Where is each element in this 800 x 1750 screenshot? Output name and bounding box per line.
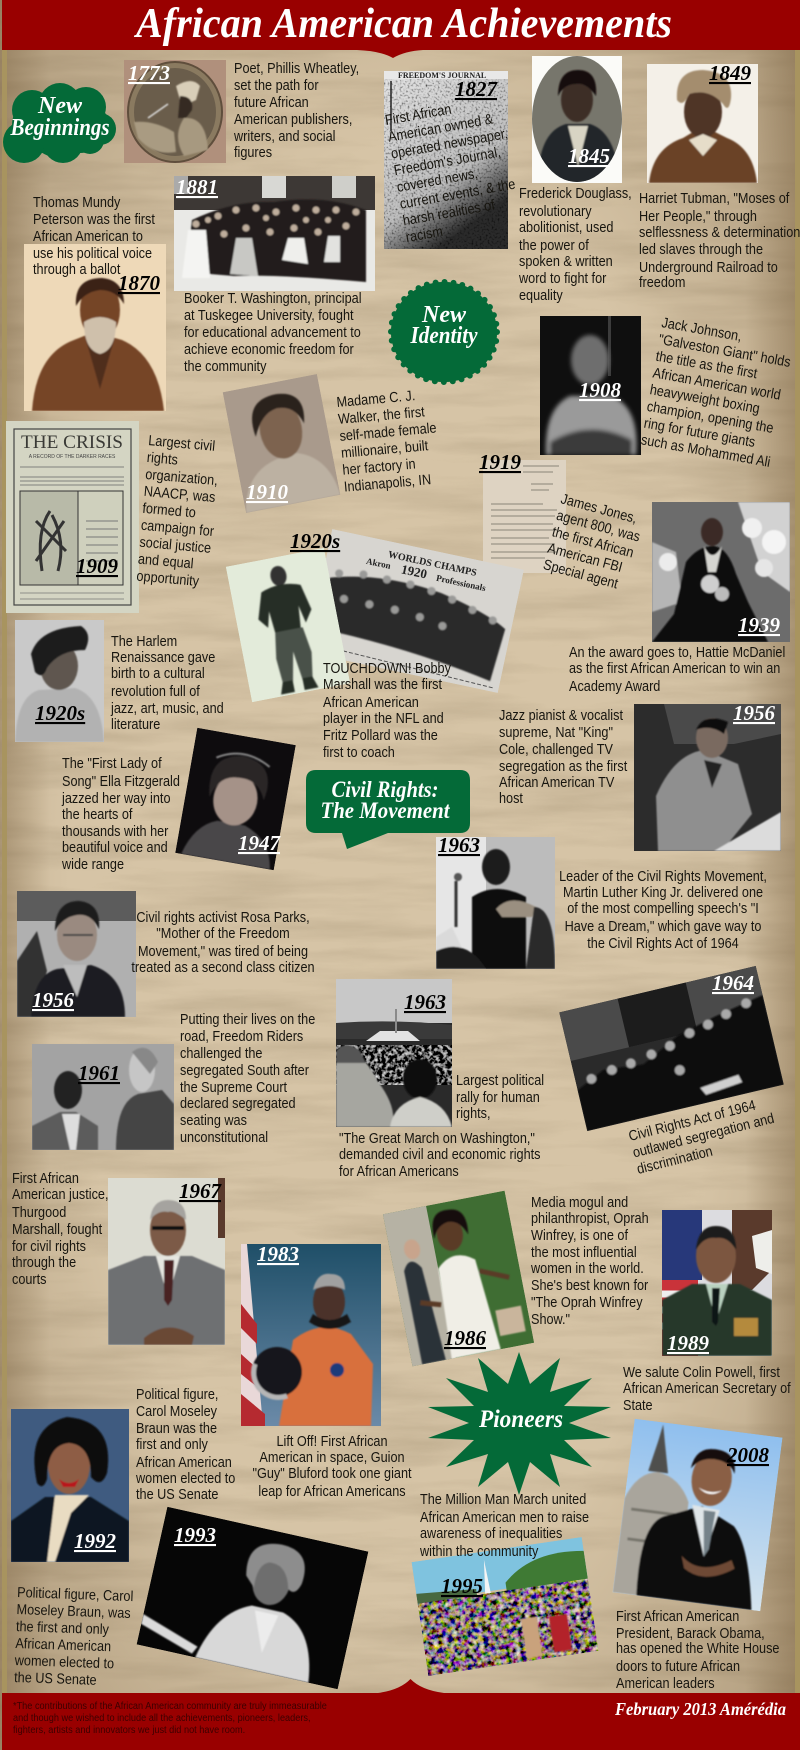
footer note: and though we wished to include all the achievements, pioneers, leaders, bbox=[13, 1712, 311, 1724]
text: Jack Johnson: Jack Johnson, bbox=[660, 314, 743, 344]
text: Ella Fitzgerald: the hearts of bbox=[62, 806, 133, 822]
text: Freedom's Journal: American owned & bbox=[387, 111, 494, 145]
text: Nat King Cole: segregation as the first bbox=[499, 758, 627, 774]
text: NAACP: rights bbox=[146, 449, 179, 468]
text: Jack Johnson: the title as the first bbox=[655, 348, 759, 382]
text: Frederick Douglass: abolitionist, used bbox=[519, 219, 613, 235]
text: Guion Bluford: "Guy" Bluford took one giant bbox=[252, 1465, 412, 1481]
text: Guion Bluford: leap for African Americans bbox=[258, 1483, 406, 1499]
text: Moseley Braun right: African American bbox=[136, 1454, 232, 1470]
year 1849: 1849 bbox=[709, 61, 752, 85]
year 1986: 1986 bbox=[444, 1326, 486, 1350]
text: Great March on Washington: "The Great March on Washington," bbox=[339, 1130, 535, 1146]
text: Harlem Renaissance: literature bbox=[111, 716, 160, 732]
text: Thurgood Marshall: through the bbox=[12, 1254, 76, 1270]
text: Rosa Parks: treated as a second class citizen bbox=[131, 959, 315, 975]
text: Bobby Marshall: first to coach bbox=[323, 744, 395, 760]
photo: Akron team 1920: Akron bbox=[365, 556, 392, 571]
text: Nat King Cole: African American TV bbox=[499, 774, 615, 790]
text: Jack Johnson: ring for future giants bbox=[643, 415, 757, 450]
photo: Bobby Marshall football player bbox=[226, 548, 350, 702]
text: Phillis Wheatley: set the path for bbox=[234, 77, 319, 93]
footer note: *The contributions of the African American community are truly immeasurable bbox=[13, 1700, 327, 1712]
text: Jack Johnson: heavyweight boxing bbox=[649, 381, 761, 416]
text: largest rally: Largest political bbox=[456, 1072, 544, 1088]
text: NAACP: social justice bbox=[139, 534, 212, 556]
text: Freedom Riders: declared segregated bbox=[180, 1095, 296, 1111]
year 1908: 1908 bbox=[579, 378, 622, 402]
photo: Akron team 1920 bbox=[306, 529, 524, 693]
text: Freedom's Journal: operated newspaper, bbox=[390, 125, 509, 162]
callout: Civil Rights The Movement: Civil Rights: bbox=[332, 777, 438, 802]
footer banner bbox=[2, 1679, 800, 1750]
text: Thurgood Marshall: American justice, bbox=[12, 1186, 109, 1202]
text: Thurgood Marshall: Marshall, fought bbox=[12, 1221, 102, 1237]
year 1845: 1845 bbox=[568, 144, 610, 168]
text: Ella Fitzgerald: jazzed her way into bbox=[61, 790, 170, 806]
year 1947: 1947 bbox=[238, 831, 282, 855]
callout: New Identity bbox=[391, 282, 497, 382]
text: Booker T. Washington: Booker T. Washington, principal bbox=[184, 290, 362, 306]
text: Thurgood Marshall: Thurgood bbox=[12, 1204, 66, 1220]
year 1964: 1964 bbox=[712, 971, 754, 995]
text: Moseley Braun right: Braun was the bbox=[136, 1420, 217, 1436]
text: Thomas Mundy Peterson: Peterson was the first bbox=[33, 211, 155, 227]
text: Thurgood Marshall: First African bbox=[12, 1170, 79, 1186]
photo: Freedom's Journal 1827 bbox=[384, 71, 508, 249]
text: Freedom's Journal: racism bbox=[404, 223, 444, 245]
photo: Tuskegee group 1881 bbox=[174, 176, 375, 291]
text: Freedom Riders: the Supreme Court bbox=[180, 1079, 287, 1095]
callout: New Identity: New bbox=[421, 302, 467, 328]
text: James Jones: agent 800, was bbox=[555, 507, 642, 545]
year 1939: 1939 bbox=[738, 613, 780, 637]
text: largest rally: rights, bbox=[456, 1105, 491, 1121]
text: Booker T. Washington: achieve economic freedom for bbox=[184, 341, 354, 357]
text: Thomas Mundy Peterson: African American to bbox=[33, 228, 143, 244]
callout: Pioneers star: Pioneers bbox=[478, 1406, 563, 1433]
text: Moseley Braun right: the US Senate bbox=[136, 1486, 218, 1502]
text: Freedom Riders: segregated South after bbox=[180, 1062, 309, 1078]
text: Colin Powell: We salute Colin Powell, first bbox=[623, 1364, 780, 1380]
text: Frederick Douglass: revolutionary bbox=[519, 203, 592, 219]
text: Harriet Tubman: led slaves through the bbox=[639, 241, 763, 257]
text: Harriet Tubman: Her People," through bbox=[639, 208, 757, 224]
year 2008: 2008 bbox=[726, 1443, 770, 1467]
text: Thurgood Marshall: for civil rights bbox=[12, 1238, 86, 1254]
text: Booker T. Washington: the community bbox=[184, 358, 267, 374]
text: Civil Rights Act: outlawed segregation and bbox=[631, 1110, 776, 1161]
year 1967: 1967 bbox=[179, 1179, 222, 1203]
text: Moseley Braun left: African American bbox=[15, 1635, 111, 1655]
text: Thomas Mundy Peterson: Thomas Mundy bbox=[33, 194, 121, 210]
text: Booker T. Washington: for educational advancement to bbox=[184, 324, 361, 340]
text: Oprah Winfrey: "The Oprah Winfrey bbox=[531, 1294, 643, 1310]
text: Bobby Marshall: Fritz Pollard was the bbox=[323, 727, 438, 743]
year 1910: 1910 bbox=[246, 480, 288, 504]
text: Thomas Mundy Peterson: use his political voice bbox=[33, 245, 152, 261]
text: Freedom Riders: seating was bbox=[180, 1112, 247, 1128]
text: Moseley Braun left: the first and only bbox=[16, 1618, 109, 1637]
year 1961: 1961 bbox=[78, 1061, 120, 1085]
text: Moseley Braun right: first and only bbox=[136, 1436, 208, 1452]
text: Oprah Winfrey: Show." bbox=[531, 1311, 570, 1327]
text: Moseley Braun left: Political figure, Carol bbox=[17, 1584, 134, 1604]
photo: Akron team 1920: WORLDS CHAMPS bbox=[387, 549, 478, 579]
year 1920s harlem: 1920s bbox=[35, 701, 85, 725]
text: Ella Fitzgerald: beautiful voice and bbox=[62, 839, 168, 855]
text: Thurgood Marshall: courts bbox=[12, 1271, 47, 1287]
title: African American Achievements bbox=[133, 1, 672, 47]
text: Oprah Winfrey: Winfrey, is one of bbox=[531, 1227, 628, 1243]
text: Freedom Riders: Putting their lives on the bbox=[180, 1011, 315, 1027]
text: James Jones: Special agent bbox=[542, 556, 620, 592]
text: Harlem Renaissance: birth to a cultural bbox=[111, 665, 205, 681]
year 1993: 1993 bbox=[174, 1523, 216, 1547]
text: largest rally: rally for human bbox=[456, 1089, 540, 1105]
text: Jack Johnson: champion, opening the bbox=[646, 398, 775, 436]
text: Rosa Parks: Movement," was tired of being bbox=[138, 943, 308, 959]
text: Harriet Tubman: selflessness & determination bbox=[639, 224, 800, 240]
year 1881: 1881 bbox=[176, 175, 218, 199]
text: Ella Fitzgerald: Song" Ella Fitzgerald bbox=[62, 773, 180, 789]
callout: Civil Rights The Movement: The Movement bbox=[320, 798, 450, 823]
photo: The Crisis 1909: A RECORD OF THE DARKER RACES bbox=[29, 454, 116, 460]
text: Nat King Cole: host bbox=[499, 790, 523, 806]
photo: Civil Rights Act signing 1964 bbox=[559, 966, 784, 1131]
photo: Freedom Riders 1961 bbox=[32, 1044, 174, 1150]
callout: New Beginnings: New bbox=[37, 93, 83, 119]
text: Madame C. J. Walker: millionaire, built bbox=[340, 437, 429, 461]
text: Oprah Winfrey: philanthropist, Oprah bbox=[531, 1210, 649, 1226]
text: Barack Obama: President, Barack Obama, bbox=[616, 1625, 765, 1641]
text: Hattie McDaniel: An the award goes to, Hattie McDaniel bbox=[569, 644, 785, 660]
text: Thomas Mundy Peterson: through a ballot bbox=[33, 261, 121, 277]
year 1773: 1773 bbox=[128, 61, 170, 85]
text: Harlem Renaissance: revolution full of bbox=[111, 683, 200, 699]
text: Moseley Braun right: Carol Moseley bbox=[136, 1403, 217, 1419]
text: Great March on Washington: for African Americans bbox=[339, 1163, 459, 1179]
text: Freedom's Journal: First African bbox=[384, 101, 452, 128]
text: James Jones: James Jones, bbox=[559, 491, 639, 526]
text: Rosa Parks: Civil rights activist Rosa Parks, bbox=[136, 909, 310, 925]
text: Barack Obama: doors to future African bbox=[616, 1658, 740, 1674]
photo: Jack Johnson 1908 bbox=[540, 316, 641, 455]
text: Freedom's Journal: current events, & the bbox=[399, 176, 516, 212]
text: NAACP: campaign for bbox=[140, 517, 215, 539]
callout: New Beginnings bbox=[3, 83, 116, 163]
photo: Akron team 1920: 1920 bbox=[400, 561, 428, 582]
text: Booker T. Washington: at Tuskegee University, fought bbox=[184, 307, 354, 323]
text: Madame C. J. Walker: Madame C. J. bbox=[336, 387, 416, 410]
text: NAACP: formed to bbox=[142, 500, 197, 521]
photo: The Crisis 1909: THE CRISIS bbox=[21, 432, 123, 453]
text: Harriet Tubman: Underground Railroad to bbox=[639, 259, 778, 275]
text: Phillis Wheatley: future African bbox=[234, 94, 309, 110]
photo: FBI document 1919 bbox=[483, 460, 566, 573]
text: Martin Luther King: Martin Luther King Jr. delivered one bbox=[563, 884, 763, 900]
year 1909: 1909 bbox=[76, 554, 118, 578]
text: Madame C. J. Walker: self-made female bbox=[339, 420, 437, 444]
photo: The Crisis 1909 bbox=[6, 421, 139, 613]
text: Civil Rights Act: Civil Rights Act of 1964 bbox=[627, 1097, 758, 1144]
text: Bobby Marshall: Marshall was the first bbox=[323, 676, 442, 692]
text: Barack Obama: has opened the White House bbox=[616, 1640, 779, 1656]
photo: Ella Fitzgerald 1947 bbox=[175, 728, 296, 870]
text: Jack Johnson: "Galveston Giant" holds bbox=[657, 331, 792, 370]
text: Freedom Riders: challenged the bbox=[180, 1045, 262, 1061]
text: Phillis Wheatley: Poet, Phillis Wheatley, bbox=[234, 60, 359, 76]
text: Moseley Braun left: Moseley Braun, was bbox=[16, 1601, 131, 1621]
photo: Oprah Winfrey 1986 bbox=[383, 1191, 534, 1366]
text: Ella Fitzgerald: The "First Lady of bbox=[62, 755, 162, 771]
photo: Colin Powell 1989 bbox=[662, 1210, 772, 1356]
text: Nat King Cole: supreme, Nat "King" bbox=[499, 724, 613, 740]
photo: Guion Bluford 1983 bbox=[241, 1244, 381, 1426]
text: Colin Powell: African American Secretary of bbox=[623, 1380, 791, 1396]
callout: New Beginnings: Beginnings bbox=[10, 115, 109, 141]
text: Harlem Renaissance: jazz, art, music, and bbox=[110, 700, 224, 716]
photo: 1993 portrait bbox=[137, 1507, 368, 1689]
photo: Phillis Wheatley 1773 bbox=[124, 60, 226, 163]
photo: Martin Luther King 1963 bbox=[436, 837, 555, 969]
credit: February 2013 Amérédia bbox=[614, 1699, 786, 1719]
text: Ella Fitzgerald: wide range bbox=[61, 856, 124, 872]
callout: Pioneers star bbox=[428, 1352, 611, 1495]
text: Hattie McDaniel: as the first African American to win an bbox=[569, 660, 780, 676]
photo: Thurgood Marshall 1967 bbox=[108, 1178, 225, 1345]
text: Harriet Tubman: freedom bbox=[639, 274, 686, 290]
text: Guion Bluford: Lift Off! First African bbox=[276, 1433, 388, 1449]
text: Frederick Douglass: Frederick Douglass, bbox=[519, 185, 632, 201]
callout: New Identity: Identity bbox=[410, 323, 478, 349]
year 1920s football: 1920s bbox=[290, 529, 340, 553]
text: Bobby Marshall: African American bbox=[323, 694, 419, 710]
year 1963 March: 1963 bbox=[404, 990, 446, 1014]
text: Moseley Braun right: Political figure, bbox=[136, 1386, 218, 1402]
text: Phillis Wheatley: American publishers, bbox=[234, 111, 352, 127]
callout: Civil Rights The Movement bbox=[306, 770, 470, 849]
text: Colin Powell: State bbox=[623, 1397, 653, 1413]
text: NAACP: opportunity bbox=[136, 568, 200, 589]
photo: Freedom's Journal 1827: FREEDOM'S JOURNAL bbox=[398, 71, 486, 80]
text: NAACP: NAACP, was bbox=[143, 483, 216, 505]
text: Rosa Parks: "Mother of the Freedom bbox=[156, 925, 290, 941]
text: Oprah Winfrey: Media mogul and bbox=[531, 1194, 628, 1210]
text: Freedom Riders: unconstitutional bbox=[180, 1129, 268, 1145]
year 1989: 1989 bbox=[667, 1331, 710, 1355]
year 1870: 1870 bbox=[118, 271, 160, 295]
text: Barack Obama: American leaders bbox=[616, 1675, 715, 1691]
text: Phillis Wheatley: figures bbox=[234, 144, 272, 160]
text: Harriet Tubman: Harriet Tubman, "Moses of bbox=[639, 190, 790, 206]
text: James Jones: the first African bbox=[550, 524, 635, 561]
text: Ella Fitzgerald: thousands with her bbox=[62, 823, 169, 839]
text: Frederick Douglass: word to fight for bbox=[518, 270, 607, 286]
text: Freedom Riders: road, Freedom Riders bbox=[180, 1028, 303, 1044]
photo: Madame C. J. Walker 1910 bbox=[223, 374, 340, 513]
text: Oprah Winfrey: She's best known for bbox=[531, 1277, 649, 1293]
photo: Frederick Douglass 1845 bbox=[532, 56, 622, 183]
text: Bobby Marshall: player in the NFL and bbox=[323, 710, 444, 726]
text: Madame C. J. Walker: Indianapolis, IN bbox=[343, 471, 432, 495]
text: Martin Luther King: the Civil Rights Act of 1964 bbox=[587, 935, 739, 951]
text: Martin Luther King: Leader of the Civil Rights Movement, bbox=[559, 868, 767, 884]
header banner bbox=[2, 0, 800, 58]
photo: Hattie McDaniel 1939 bbox=[652, 502, 790, 642]
photo: Carol Moseley Braun 1992 bbox=[11, 1409, 129, 1562]
text: Frederick Douglass: equality bbox=[519, 287, 563, 303]
photo: Barack Obama 2008 bbox=[612, 1419, 783, 1611]
text: Martin Luther King: Have a Dream," which gave way to bbox=[565, 918, 761, 934]
text: Frederick Douglass: the power of bbox=[519, 237, 589, 253]
text: Oprah Winfrey: women in the world. bbox=[530, 1260, 644, 1276]
photo: Akron team 1920: Professionals bbox=[435, 573, 487, 593]
year 1956 Rosa Parks: 1956 bbox=[32, 988, 74, 1012]
text: NAACP: and equal bbox=[137, 551, 194, 572]
text: Harlem Renaissance: The Harlem bbox=[111, 633, 177, 649]
text: Nat King Cole: Cole, challenged TV bbox=[499, 741, 614, 757]
text: Million Man March: The Million Man March united bbox=[420, 1491, 586, 1507]
text: Oprah Winfrey: the most influential bbox=[531, 1244, 637, 1260]
photo: Million Man March 1995 bbox=[412, 1537, 598, 1676]
photo: March on Washington 1963 bbox=[336, 979, 452, 1127]
text: Nat King Cole: Jazz pianist & vocalist bbox=[499, 707, 623, 723]
photo: Nat King Cole 1956 bbox=[634, 704, 781, 851]
footer note: fighters, artists and innovators we just did not have room. bbox=[13, 1724, 245, 1736]
text: Freedom's Journal: harsh realities of bbox=[401, 197, 496, 229]
year 1827: 1827 bbox=[455, 77, 498, 101]
text: Barack Obama: First African American bbox=[616, 1608, 739, 1624]
photo: Harriet Tubman 1849 bbox=[647, 64, 758, 183]
text: Madame C. J. Walker: her factory in bbox=[342, 456, 416, 478]
text: Frederick Douglass: spoken & written bbox=[519, 253, 613, 269]
text: Million Man March: within the community bbox=[419, 1543, 539, 1559]
text: Million Man March: African American men to raise bbox=[420, 1509, 589, 1525]
text: Harlem Renaissance: Renaissance gave bbox=[111, 649, 215, 665]
text: Freedom's Journal: Freedom's Journal, bbox=[393, 144, 502, 178]
text: NAACP: organization, bbox=[145, 466, 218, 488]
photo: Rosa Parks 1956 bbox=[17, 891, 136, 1017]
year 1919: 1919 bbox=[479, 450, 522, 474]
photo: Thomas Mundy Peterson 1870 bbox=[24, 244, 166, 411]
text: Martin Luther King: of the most compelling speech's "I bbox=[567, 900, 759, 916]
text: Moseley Braun left: women elected to bbox=[14, 1652, 114, 1672]
text: Madame C. J. Walker: Walker, the first bbox=[337, 404, 425, 427]
text: Phillis Wheatley: writers, and social bbox=[233, 128, 335, 144]
text: NAACP: Largest civil bbox=[148, 432, 216, 454]
text: Jack Johnson: African American world bbox=[652, 365, 782, 403]
text: James Jones: American FBI bbox=[546, 540, 624, 575]
text: Civil Rights Act: discrimination bbox=[635, 1143, 714, 1177]
text: Freedom's Journal: covered news, bbox=[396, 165, 479, 195]
text: Jack Johnson: such as Mohammed Ali bbox=[640, 432, 772, 470]
text: Moseley Braun left: the US Senate bbox=[14, 1669, 97, 1688]
text: Great March on Washington: demanded civil and economic rights bbox=[339, 1146, 541, 1162]
text: Moseley Braun right: women elected to bbox=[135, 1470, 235, 1486]
year 1992: 1992 bbox=[74, 1529, 116, 1553]
text: Guion Bluford: American in space, Guion bbox=[259, 1449, 405, 1465]
text: Hattie McDaniel: Academy Award bbox=[569, 678, 660, 694]
photo: Harlem Renaissance 1920s bbox=[15, 620, 104, 742]
year 1983: 1983 bbox=[257, 1242, 299, 1266]
year 1963 MLK: 1963 bbox=[438, 833, 480, 857]
year 1956 Nat Cole: 1956 bbox=[733, 701, 776, 725]
text: Million Man March: awareness of inequalities bbox=[420, 1525, 562, 1541]
text: Bobby Marshall: TOUCHDOWN! Bobby bbox=[323, 660, 451, 676]
year 1995: 1995 bbox=[441, 1574, 483, 1598]
